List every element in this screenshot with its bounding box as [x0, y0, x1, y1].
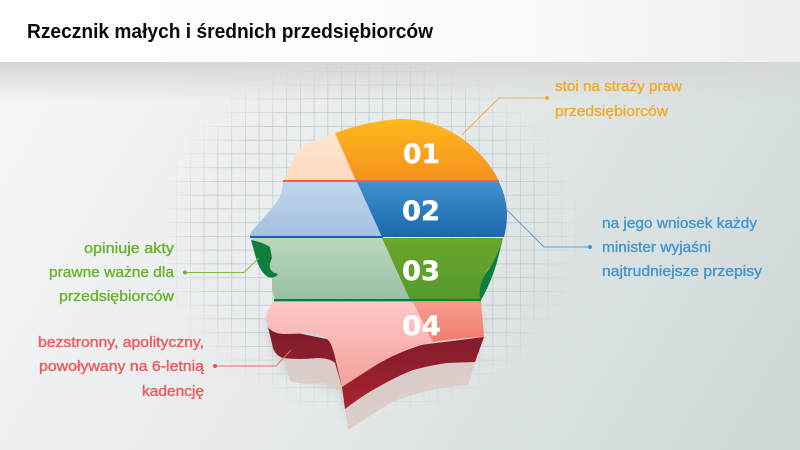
text: 02: najtrudniejsze przepisy: [602, 263, 763, 280]
title band: [0, 0, 800, 62]
text: 04: powoływany na 6-letnią: [39, 358, 205, 375]
segment 01: 01: [403, 139, 440, 170]
text: 03: [49, 240, 175, 305]
segment 03: 03: [402, 256, 440, 287]
text: 03: opiniuje akty: [84, 240, 175, 257]
text: 04: [38, 334, 205, 400]
text: 04: kadencję: [142, 383, 204, 400]
text: 04: bezstronny, apolityczny,: [38, 334, 204, 351]
text: 01: przedsiębiorców: [555, 103, 668, 120]
segment 01: [283, 119, 499, 182]
text: 02: [602, 215, 763, 280]
segment 03: [251, 238, 503, 301]
segment 04: 04: [402, 311, 441, 342]
segment 02: [250, 182, 507, 238]
connector: 04: [213, 350, 291, 368]
connector: 01: [462, 96, 549, 135]
text: 03: prawne ważne dla: [49, 264, 175, 281]
head shadow: [264, 320, 486, 430]
text: 02: na jego wniosek każdy: [602, 215, 757, 232]
connector: 03: [183, 258, 259, 274]
text: 01: [555, 78, 682, 120]
title: Rzecznik małych i średnich przedsiębiorców: [27, 21, 433, 43]
head infographic: [250, 119, 507, 409]
text: 03: przedsiębiorców: [59, 288, 174, 305]
connector: 02: [507, 210, 592, 249]
segment 04: [266, 302, 484, 409]
text: 01: stoi na straży praw: [555, 78, 682, 95]
text: 02: minister wyjaśni: [602, 239, 711, 256]
segment 02: 02: [402, 196, 440, 227]
